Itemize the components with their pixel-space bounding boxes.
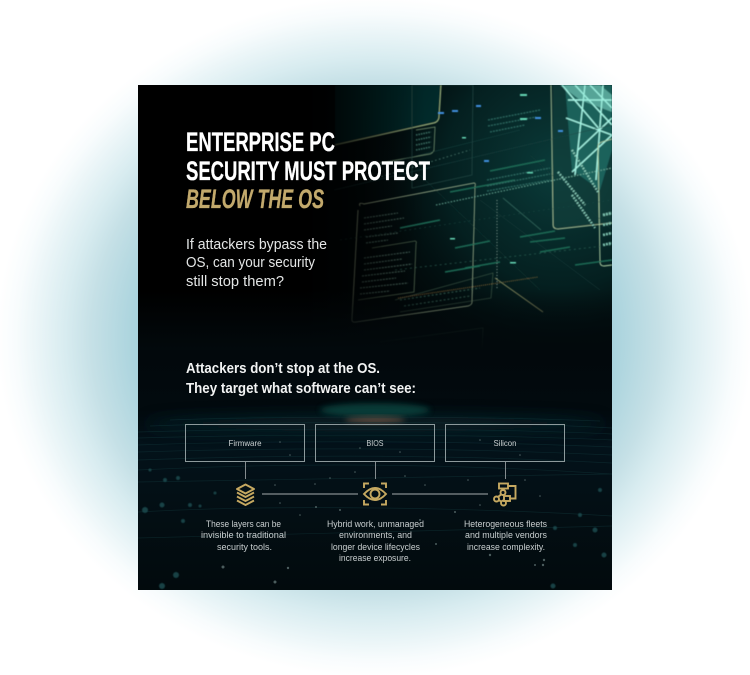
text: column 2: Hybrid work, unmanaged (327, 519, 424, 529)
text: column 3: and multiple vendors (465, 530, 547, 540)
box: Firmware: Firmware (228, 438, 262, 448)
section heading: They target what software can’t see: (186, 381, 416, 397)
title line 3: BELOW THE OS (186, 184, 324, 214)
box: Firmware (186, 424, 304, 462)
intro question: still stop them? (186, 273, 284, 290)
intro question (186, 236, 327, 290)
icon: flowchart (494, 484, 516, 506)
icon: eye (364, 484, 386, 504)
text: column 2: increase exposure. (339, 553, 411, 563)
box: BIOS: BIOS (366, 438, 384, 448)
top panel: circuit imagery (138, 85, 612, 350)
intro question: If attackers bypass the (186, 236, 327, 253)
card background (138, 85, 612, 590)
box: Silicon: Silicon (494, 438, 517, 448)
text: column 1 (201, 519, 286, 552)
box: Silicon (446, 424, 564, 462)
text: column 2 (327, 519, 424, 563)
code lines (360, 213, 412, 294)
text: column 3: increase complexity. (467, 542, 545, 552)
section heading (186, 361, 416, 397)
bright burst (565, 85, 612, 190)
section heading: Attackers don’t stop at the OS. (186, 361, 380, 377)
text: column 1: invisible to traditional (201, 530, 286, 540)
title (186, 132, 430, 208)
bottom panel: data horizon (138, 350, 612, 590)
box: BIOS (316, 424, 434, 462)
title line 2: SECURITY MUST PROTECT (186, 156, 430, 186)
window frames (335, 85, 441, 145)
text: column 1: These layers can be (206, 519, 281, 529)
green dashes (400, 160, 612, 272)
connectors (246, 461, 506, 494)
text: column 3 (464, 519, 547, 552)
text: column 1: security tools. (217, 542, 272, 552)
icon: layers (237, 484, 254, 505)
intro question: OS, can your security (186, 254, 315, 271)
text: column 2: environments, and (339, 530, 412, 540)
text: column 2: longer device lifecycles (331, 542, 420, 552)
text: column 3: Heterogeneous fleets (464, 519, 547, 529)
title line 1: ENTERPRISE PC (186, 127, 335, 157)
